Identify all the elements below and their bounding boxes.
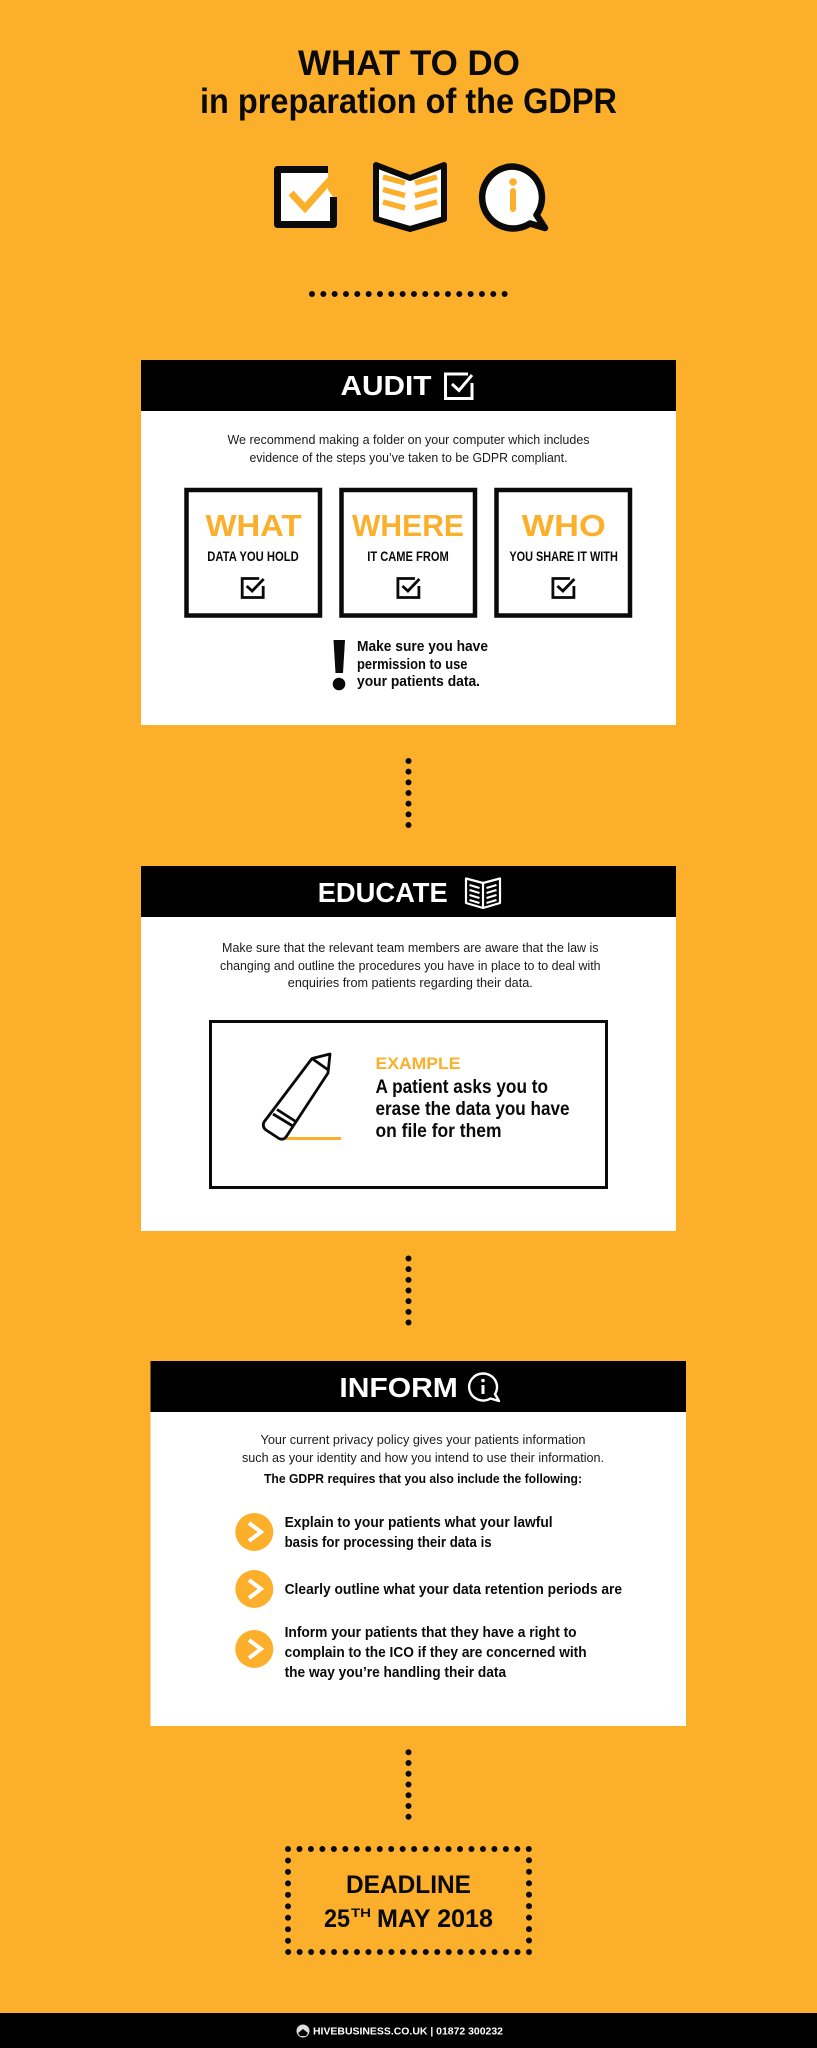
deadline text: 25 (324, 1905, 350, 1933)
permission note (357, 639, 488, 690)
list item 2 (235, 1570, 622, 1608)
title: WHAT TO DO (298, 44, 520, 83)
dotted connector: inform to deadline (406, 1752, 412, 1818)
inform heading: INFORM (339, 1372, 458, 1403)
icon: pencil (263, 1054, 341, 1139)
deadline text: TH (351, 1906, 371, 1920)
example text: A patient asks you to (376, 1076, 548, 1098)
deadline dotted box (288, 1849, 529, 1952)
icon: large open book (376, 165, 444, 229)
inform intro text: such as your identity and how you intend to use their information. (242, 1450, 604, 1465)
card: where: WHERE (352, 508, 464, 543)
example text: erase the data you have (376, 1098, 570, 1120)
inform intro text: Your current privacy policy gives your patients information (260, 1432, 586, 1447)
inform intro text: The GDPR requires that you also include the following: (264, 1471, 582, 1486)
panel: educate (141, 866, 676, 1231)
educate intro text: enquiries from patients regarding their data. (288, 975, 533, 990)
list item 3: the way you’re handling their data (285, 1665, 507, 1681)
icon: exclamation mark (333, 640, 345, 690)
icon: audit header checkbox (446, 374, 472, 398)
panel: audit (141, 360, 676, 725)
list item 1: Explain to your patients what your lawful (285, 1515, 553, 1531)
dotted divider: horizontal (312, 291, 506, 297)
card: where (342, 490, 475, 616)
educate intro text (220, 940, 601, 990)
card: what: WHAT (206, 508, 302, 543)
audit header bar (141, 360, 676, 411)
list item 2: Clearly outline what your data retention periods are (285, 1582, 622, 1598)
deadline text (324, 1871, 493, 1933)
icon: hive logo (296, 2024, 310, 2038)
educate intro text: Make sure that the relevant team members are aware that the law is (222, 940, 599, 955)
example box (210, 1022, 606, 1188)
audit intro text: We recommend making a folder on your computer which includes (228, 432, 590, 447)
example text: on file for them (376, 1120, 502, 1142)
audit intro text (228, 432, 590, 465)
inform header bar (150, 1361, 686, 1412)
title: in preparation of the GDPR (200, 82, 617, 121)
title (200, 44, 617, 121)
icon: large checkbox (278, 170, 334, 224)
educate heading: EDUCATE (318, 877, 448, 908)
educate intro text: changing and outline the procedures you have in place to to deal with (220, 958, 601, 973)
icon: inform header info bubble (469, 1373, 499, 1401)
icon: educate header book (466, 878, 500, 908)
icon: large info speech bubble (482, 166, 545, 228)
card: who: YOU SHARE IT WITH (509, 549, 618, 564)
deadline text: DEADLINE (346, 1871, 471, 1899)
inform intro text (242, 1432, 604, 1486)
list item 1 (235, 1513, 553, 1551)
permission note: permission to use (357, 657, 468, 673)
card: where: IT CAME FROM (367, 549, 449, 564)
permission note: your patients data. (357, 674, 480, 690)
card: what: DATA YOU HOLD (207, 549, 299, 564)
example text (376, 1076, 570, 1142)
example label: EXAMPLE (376, 1054, 460, 1073)
footer text: HIVEBUSINESS.CO.UK | 01872 300232 (313, 2026, 503, 2038)
list item 3 (235, 1625, 587, 1681)
footer bar (0, 2013, 817, 2048)
panel: inform (150, 1361, 686, 1726)
audit heading: AUDIT (340, 370, 432, 401)
list item 3: Inform your patients that they have a right to (285, 1625, 577, 1641)
dotted connector: audit to educate (406, 761, 412, 826)
list item 3: complain to the ICO if they are concerned with (285, 1645, 587, 1661)
educate header bar (141, 866, 676, 917)
deadline text: MAY 2018 (377, 1905, 493, 1933)
card: what (186, 490, 320, 616)
audit intro text: evidence of the steps you’ve taken to be GDPR compliant. (250, 450, 568, 465)
list item 1: basis for processing their data is (285, 1535, 492, 1551)
card: who (496, 490, 630, 616)
dotted connector: educate to inform (406, 1258, 412, 1324)
card: who: WHO (522, 508, 606, 543)
permission note: Make sure you have (357, 639, 488, 655)
